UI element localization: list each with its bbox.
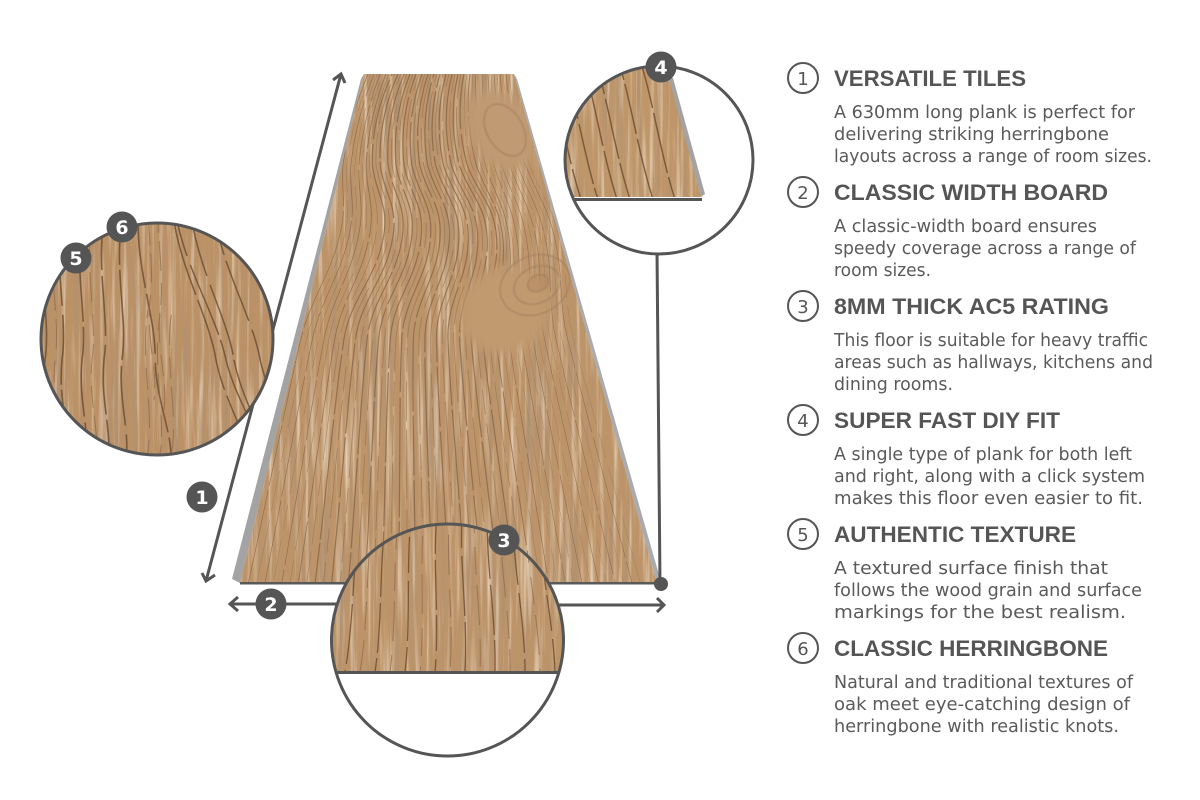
feature 2: CLASSIC WIDTH BOARD [834, 180, 1108, 205]
feature 1: layouts across a range of room sizes. [834, 146, 1152, 167]
feature 3: 3 [797, 297, 809, 318]
feature 5 [788, 519, 1142, 623]
feature 6 [788, 633, 1134, 737]
badge 6 [106, 212, 138, 242]
zoom circle: thickness [330, 522, 565, 758]
feature 5: A textured surface finish that [834, 558, 1108, 579]
feature 5: follows the wood grain and surface [834, 580, 1142, 601]
feature 5: markings for the best realism. [834, 602, 1126, 623]
badge 1: 1 [195, 487, 209, 509]
feature 5: 5 [797, 525, 809, 546]
feature 4: A single type of plank for both left [834, 444, 1132, 465]
feature 3: areas such as hallways, kitchens and [834, 352, 1153, 373]
arrow: width dimension [230, 597, 664, 612]
feature 2 [788, 177, 1137, 281]
feature 1 [788, 63, 1152, 167]
feature 2: A classic-width board ensures [834, 216, 1097, 237]
feature 6: herringbone with realistic knots. [834, 716, 1119, 737]
badge 5: 5 [69, 248, 83, 270]
feature 2: speedy coverage across a range of [834, 238, 1137, 259]
badge 4 [646, 52, 676, 82]
badge 3 [488, 524, 520, 556]
feature 6: oak meet eye-catching design of [834, 694, 1131, 715]
zoom circle: click edge [564, 66, 754, 256]
feature 3: dining rooms. [834, 374, 953, 395]
feature 5: AUTHENTIC TEXTURE [834, 522, 1076, 547]
feature 4: SUPER FAST DIY FIT [834, 408, 1061, 433]
feature 3: 8MM THICK AC5 RATING [834, 294, 1109, 319]
feature 1: VERSATILE TILES [834, 66, 1026, 91]
plank illustration [230, 70, 670, 590]
badge 5 [60, 242, 92, 274]
feature 1: 1 [797, 69, 809, 90]
badge 2: 2 [264, 594, 278, 616]
feature 1: A 630mm long plank is perfect for [834, 102, 1136, 123]
badge 6: 6 [115, 217, 129, 239]
feature 2: 2 [797, 183, 809, 204]
badge 3: 3 [497, 530, 511, 552]
feature 6: 6 [797, 639, 809, 660]
feature 6: CLASSIC HERRINGBONE [834, 636, 1108, 661]
feature 3: This floor is suitable for heavy traffic [833, 330, 1148, 351]
feature 3 [788, 291, 1153, 395]
badge 2 [256, 588, 286, 620]
feature 4 [788, 405, 1145, 509]
knot and cathedral grain [459, 88, 571, 358]
zoom circle: texture [40, 222, 274, 456]
connector line and dot [654, 250, 668, 591]
feature 4: and right, along with a click system [834, 466, 1145, 487]
badge 1 [186, 482, 218, 512]
feature 6: Natural and traditional textures of [834, 672, 1134, 693]
feature 2: room sizes. [834, 260, 931, 281]
badge 4: 4 [654, 57, 668, 79]
arrow: length dimension [202, 74, 345, 581]
feature 4: 4 [797, 411, 809, 432]
feature 1: delivering striking herringbone [834, 124, 1109, 145]
feature 4: makes this floor even easier to fit. [834, 488, 1143, 509]
